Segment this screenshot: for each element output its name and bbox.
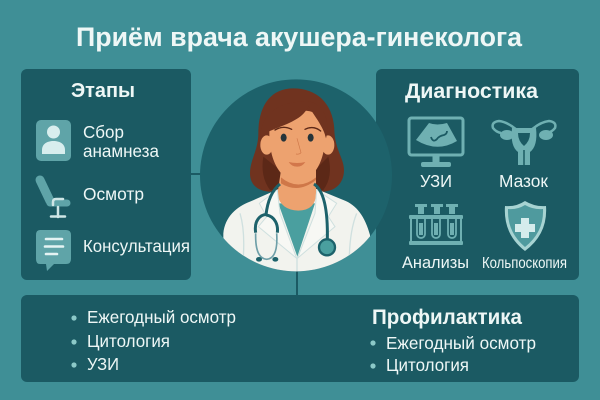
- face: [269, 110, 326, 173]
- text: colposcopy: Кольпоскопия: [482, 255, 567, 272]
- heading: stages: Этапы: [71, 80, 135, 102]
- neck: [277, 170, 316, 211]
- title: Приём врача акушера-гинеколога: [76, 22, 523, 52]
- hair back: [250, 88, 344, 192]
- icon: shield: [505, 201, 546, 251]
- text: history taking line 2: анамнеза: [83, 141, 159, 161]
- icon: ultrasound monitor: [409, 118, 463, 167]
- heading: prevention: Профилактика: [372, 306, 522, 329]
- eyes: [281, 134, 287, 142]
- icon: uterus: [493, 121, 555, 166]
- list: right items: [370, 333, 536, 375]
- list: right items: Цитология: [386, 355, 469, 375]
- icon: test tubes: [409, 204, 463, 245]
- text: smear: Мазок: [499, 171, 548, 191]
- nose and mouth: [296, 138, 301, 154]
- list: right items: Ежегодный осмотр: [386, 333, 536, 353]
- heading: diagnostics: Диагностика: [405, 80, 538, 103]
- text: history taking: Сбор: [83, 122, 124, 142]
- icon: patient card: [36, 120, 71, 161]
- text: consultation: Консультация: [83, 236, 190, 256]
- icon: speech bubble: [36, 230, 71, 271]
- scrub shirt: [278, 203, 315, 257]
- eyebrows: [275, 127, 321, 131]
- icon: exam chair: [40, 180, 67, 217]
- coat: [223, 188, 370, 277]
- illustration: doctor portrait: [200, 79, 376, 272]
- stethoscope: [266, 184, 327, 240]
- list: left items: Цитология: [87, 331, 170, 351]
- panel: stages: [21, 69, 191, 280]
- panel: prevention: [21, 295, 579, 382]
- text: examination: Осмотр: [83, 184, 144, 204]
- panel: diagnostics: [376, 69, 579, 280]
- lapels: [258, 190, 297, 258]
- list: left items: Ежегодный осмотр: [87, 307, 236, 327]
- list: left items: [71, 307, 236, 374]
- text: ultrasound: УЗИ: [420, 171, 452, 191]
- list: left items: УЗИ: [87, 354, 119, 374]
- text: lab tests: Анализы: [402, 253, 469, 272]
- ears: [260, 135, 273, 155]
- hair fringe: [269, 110, 327, 138]
